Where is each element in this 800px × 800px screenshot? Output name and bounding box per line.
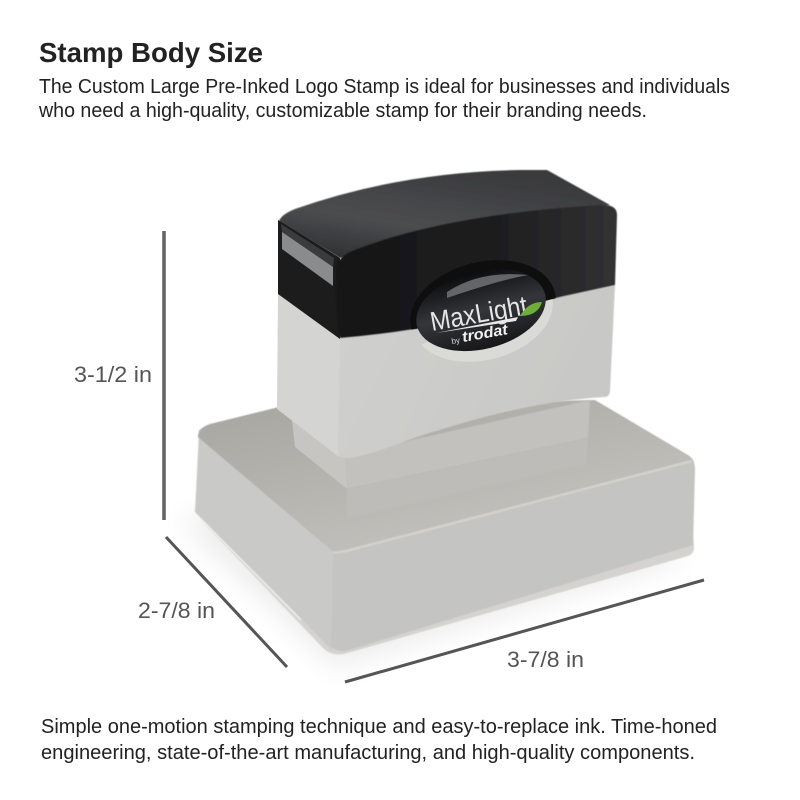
badge: MaxLight by trodat: trodat — [461, 321, 510, 346]
base: front face — [331, 459, 695, 651]
footer paragraph — [41, 716, 717, 764]
body: front — [338, 285, 615, 458]
dimension label: width: 3-7/8 in — [507, 647, 584, 672]
intro paragraph: The Custom Large Pre-Inked Logo Stamp is ideal for businesses and individuals — [39, 76, 730, 98]
footer paragraph: engineering, state-of-the-art manufacturing, and high-quality components. — [41, 742, 695, 764]
base: left face — [195, 428, 336, 650]
intro paragraph: who need a high-quality, customizable stamp for their branding needs. — [38, 100, 647, 122]
cap: side window — [281, 224, 334, 268]
base: ledge rim — [195, 514, 694, 654]
stamp illustration — [178, 170, 695, 668]
neck: left side — [292, 420, 347, 489]
dimension line: height — [162, 231, 166, 520]
base: highlight edges — [333, 461, 692, 553]
badge: MaxLight by trodat — [408, 256, 554, 364]
title: Stamp Body Size — [39, 37, 263, 68]
badge recess: light ring on body — [422, 299, 553, 362]
badge: MaxLight by trodat: MaxLight — [428, 290, 530, 337]
body: left side — [277, 290, 341, 457]
cap: left side — [278, 220, 340, 339]
badge: MaxLight by trodat: by — [451, 336, 461, 346]
footer paragraph: Simple one-motion stamping technique and easy-to-replace ink. Time-honed — [41, 716, 717, 738]
cap: front — [336, 205, 617, 338]
neck: front upper — [345, 400, 590, 489]
dimension label: height: 3-1/2 in — [74, 362, 152, 387]
neck: front lower — [347, 438, 588, 518]
ground shadow — [178, 500, 685, 668]
dimension line: depth — [166, 537, 287, 667]
intro paragraph — [38, 76, 730, 122]
cap: top — [279, 170, 610, 258]
base: top face — [198, 400, 693, 553]
badge recess: dark ring on cap — [410, 260, 556, 330]
dimension line: width — [345, 580, 704, 682]
cap: top reflection — [345, 208, 607, 262]
dimension label: depth: 2-7/8 in — [138, 598, 215, 623]
